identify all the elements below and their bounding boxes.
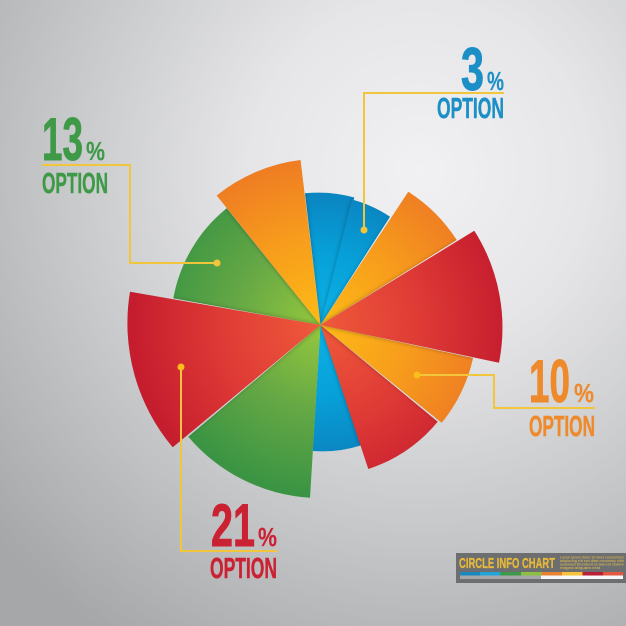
slice: orange right	[320, 325, 473, 423]
label: 21 percent: OPTION	[210, 553, 277, 585]
slice: green bottom	[188, 325, 320, 498]
legend title: CIRCLE INFO CHART	[459, 555, 555, 572]
connector: 13 percent	[42, 165, 220, 266]
connector: 3 percent	[360, 93, 504, 234]
label: 10 percent: %	[574, 378, 594, 408]
label: 3 percent: OPTION	[437, 93, 504, 125]
slice: orange top	[217, 160, 320, 325]
label: 21 percent: 21	[211, 492, 255, 559]
legend colour strip	[460, 572, 623, 579]
legend small text: Lorem ipsum dolor sit amet consectetur	[560, 556, 625, 560]
slice: blue upper right	[320, 200, 390, 325]
slice: blue top	[305, 193, 354, 325]
label: 10 percent	[529, 348, 595, 443]
label: 3 percent: 3	[461, 36, 484, 103]
label: 21 percent: %	[258, 522, 277, 552]
legend small text	[560, 556, 625, 570]
legend small text: euismod tincidunt ut laoreet dolore	[560, 562, 624, 566]
label: 3 percent	[437, 36, 504, 125]
connector: 21 percent	[178, 364, 277, 551]
slice: red bottom	[320, 325, 438, 469]
connector: 10 percent	[414, 372, 595, 408]
slice: green upper left	[173, 208, 320, 325]
label: 13 percent: 13	[42, 106, 83, 173]
label: 10 percent: 10	[529, 348, 570, 415]
legend banner	[456, 553, 626, 583]
label: 13 percent: %	[86, 136, 105, 166]
label: 13 percent: OPTION	[42, 168, 108, 200]
slice: orange upper right	[320, 192, 457, 325]
legend small text: adipiscing elit sed diam nonummy nibh	[560, 559, 624, 563]
slice: blue bottom	[313, 325, 362, 451]
slice: red right	[320, 231, 502, 363]
pie chart	[127, 160, 502, 498]
label: 3 percent: %	[487, 66, 504, 96]
legend small text: magna aliquam erat	[560, 566, 601, 570]
slice: red left	[127, 292, 320, 447]
